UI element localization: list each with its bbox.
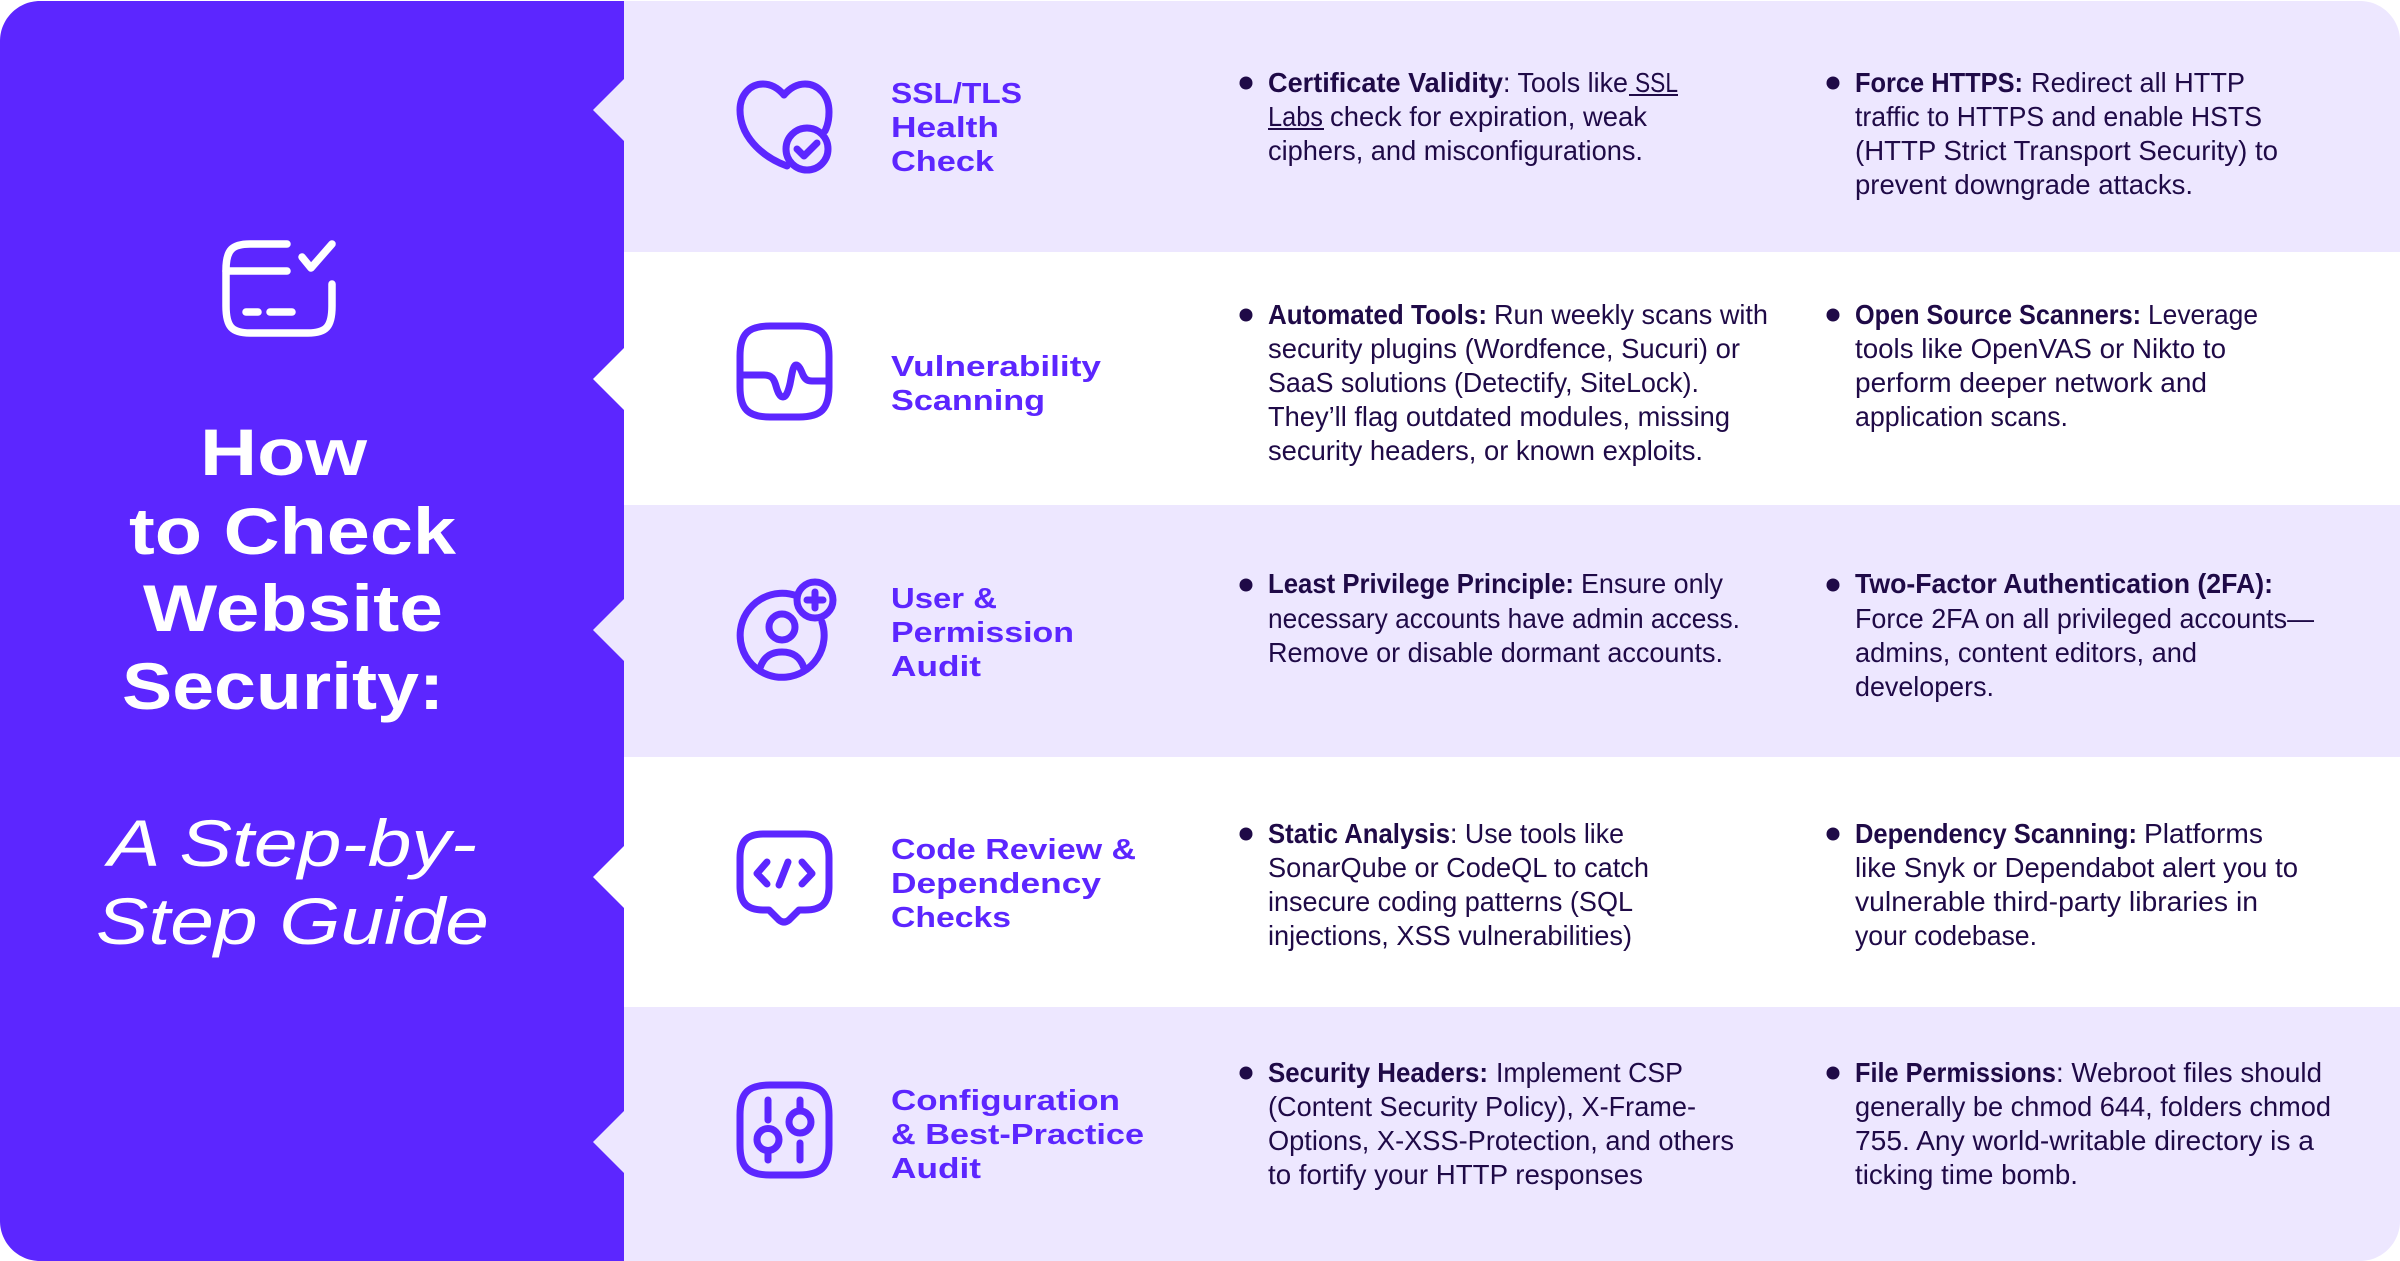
subheading: A Step-by- [103, 806, 477, 880]
bullet: file permissions [1826, 1057, 2331, 1190]
step title: Permission [891, 617, 1074, 649]
bullet: security headers: to fortify your HTTP responses [1268, 1159, 1643, 1190]
step title: Audit [891, 651, 981, 683]
bullet: least privilege [1240, 568, 1740, 668]
step title: Health [891, 112, 999, 144]
bullet: automated tools: SaaS solutions (Detectify, SiteLock). [1268, 367, 1699, 398]
row background [624, 252, 2400, 505]
bullet: automated tools: Run weekly scans with [1494, 299, 1768, 330]
step title: Checks [891, 902, 1011, 934]
icon: code speech bubble [740, 834, 829, 922]
bullet: file permissions: 755. Any world-writable directory is a [1855, 1125, 2315, 1156]
bullet: two-factor authentication: Two-Factor Authentication (2FA): [1855, 568, 2273, 599]
bullet: certificate validity: check for expiration, weak [1330, 101, 1647, 132]
notch arrow [593, 1111, 624, 1173]
bullet: certificate validity: ciphers, and misconfigurations. [1268, 135, 1643, 166]
heading: Website [143, 571, 443, 645]
bullet: dependency scanning: like Snyk or Dependabot alert you to [1855, 852, 2298, 883]
bullet: force https: Redirect all HTTP [2031, 67, 2245, 98]
step title [891, 1085, 1144, 1185]
panel: code review and dependency checks [593, 757, 2400, 1007]
bullet: certificate validity: Certificate Validity [1268, 67, 1504, 98]
step title [891, 583, 1074, 683]
bullet: open source scanners [1826, 299, 2258, 432]
bullet: security headers: Security Headers: [1268, 1057, 1488, 1088]
step title: Vulnerability [891, 351, 1101, 383]
bullet: force https: traffic to HTTPS and enable HSTS [1855, 101, 2262, 132]
bullet: force https: prevent downgrade attacks. [1855, 169, 2193, 200]
bullet: open source scanners: Leverage [2148, 299, 2258, 330]
bullet: static analysis: injections, XSS vulnerabilities) [1268, 920, 1632, 951]
icon: user with plus [740, 582, 833, 677]
bullet: dependency scanning: Platforms [2144, 818, 2263, 849]
icon: pulse monitor [740, 326, 829, 417]
panel: SSL/TLS health check [593, 1, 2400, 252]
step title: Audit [891, 1153, 981, 1185]
notch arrow [593, 348, 624, 410]
icon: heart with check [740, 84, 829, 170]
bullet: automated tools: security plugins (Wordfence, Sucuri) or [1268, 333, 1740, 364]
step title: Configuration [891, 1085, 1120, 1117]
bullet: force https: Force HTTPS: [1855, 67, 2023, 98]
subheading [96, 806, 489, 958]
step title: Scanning [891, 385, 1045, 417]
bullet: open source scanners: application scans. [1855, 401, 2068, 432]
row background [624, 505, 2400, 757]
sidebar background [0, 1, 624, 1261]
bullet: dependency scanning: your codebase. [1855, 920, 2037, 951]
bullet: two-factor authentication: admins, content editors, and [1855, 637, 2197, 668]
bullet: two-factor authentication [1826, 568, 2314, 702]
bullet: dependency scanning [1826, 818, 2298, 951]
bullet: certificate validity [1240, 67, 1678, 166]
bullet: certificate validity: SSL [1635, 67, 1678, 98]
bullet: force https [1826, 67, 2278, 200]
bullet: dependency scanning: Dependency Scanning: [1855, 818, 2137, 849]
bullet: file permissions: : Webroot files should [2056, 1057, 2322, 1088]
bullet: open source scanners: tools like OpenVAS or Nikto to [1855, 333, 2226, 364]
bullet: static analysis [1240, 818, 1649, 951]
bullet: automated tools: Automated Tools: [1268, 299, 1487, 330]
panel: user and permission audit [593, 505, 2400, 757]
panel: configuration and best-practice audit [593, 1007, 2400, 1261]
bullet: automated tools [1240, 299, 1768, 466]
step title: Dependency [891, 868, 1101, 900]
row background [624, 1, 2400, 252]
step title [891, 834, 1136, 934]
bullet: certificate validity: : Tools like [1503, 67, 1628, 98]
bullet: two-factor authentication: developers. [1855, 671, 1994, 702]
step title: Check [891, 146, 995, 178]
panel: title sidebar [0, 1, 624, 1261]
icon: sliders [740, 1085, 829, 1175]
bullet: least privilege: Ensure only [1581, 568, 1723, 599]
bullet: automated tools: They’ll flag outdated modules, missing [1268, 401, 1730, 432]
bullet: static analysis: Static Analysis [1268, 818, 1450, 849]
step title: SSL/TLS [891, 78, 1022, 110]
row background [624, 757, 2400, 1007]
bullet: least privilege: necessary accounts have admin access. [1268, 603, 1740, 634]
bullet: security headers: (Content Security Policy), X-Frame- [1268, 1091, 1696, 1122]
bullet: automated tools: security headers, or known exploits. [1268, 435, 1703, 466]
bullet: open source scanners: Open Source Scanners: [1855, 299, 2141, 330]
bullet: security headers: Implement CSP [1496, 1057, 1683, 1088]
bullet: least privilege: Remove or disable dormant accounts. [1268, 637, 1723, 668]
bullet: static analysis: insecure coding patterns (SQL [1268, 886, 1633, 917]
heading: Security: [122, 649, 444, 723]
bullet: security headers: Options, X-XSS-Protection, and others [1268, 1125, 1734, 1156]
bullet: static analysis: : Use tools like [1450, 818, 1624, 849]
bullet: force https: (HTTP Strict Transport Security) to [1855, 135, 2278, 166]
bullet: file permissions: ticking time bomb. [1855, 1159, 2078, 1190]
bullet: file permissions: generally be chmod 644, folders chmod [1855, 1091, 2331, 1122]
step title [891, 351, 1101, 417]
heading [122, 415, 456, 723]
step title: User & [891, 583, 997, 615]
step title [891, 78, 1022, 178]
icon: checklist card [226, 244, 332, 333]
bullet: open source scanners: perform deeper network and [1855, 367, 2207, 398]
notch arrow [593, 79, 624, 141]
bullet: security headers [1240, 1057, 1734, 1190]
bullet: two-factor authentication: Force 2FA on all privileged accounts— [1855, 603, 2314, 634]
panel: vulnerability scanning [593, 252, 2400, 505]
subheading: Step Guide [96, 884, 489, 958]
step title: & Best-Practice [891, 1119, 1144, 1151]
bullet: dependency scanning: vulnerable third-party libraries in [1855, 886, 2258, 917]
step title: Code Review & [891, 834, 1136, 866]
row background [624, 1007, 2400, 1261]
bullet: static analysis: SonarQube or CodeQL to catch [1268, 852, 1649, 883]
bullet: certificate validity: Labs [1268, 101, 1323, 132]
notch arrow [593, 846, 624, 908]
bullet: file permissions: File Permissions [1855, 1057, 2056, 1088]
notch arrow [593, 599, 624, 661]
heading: How [200, 415, 368, 489]
heading: to Check [129, 494, 456, 568]
bullet: least privilege: Least Privilege Principle: [1268, 568, 1574, 599]
